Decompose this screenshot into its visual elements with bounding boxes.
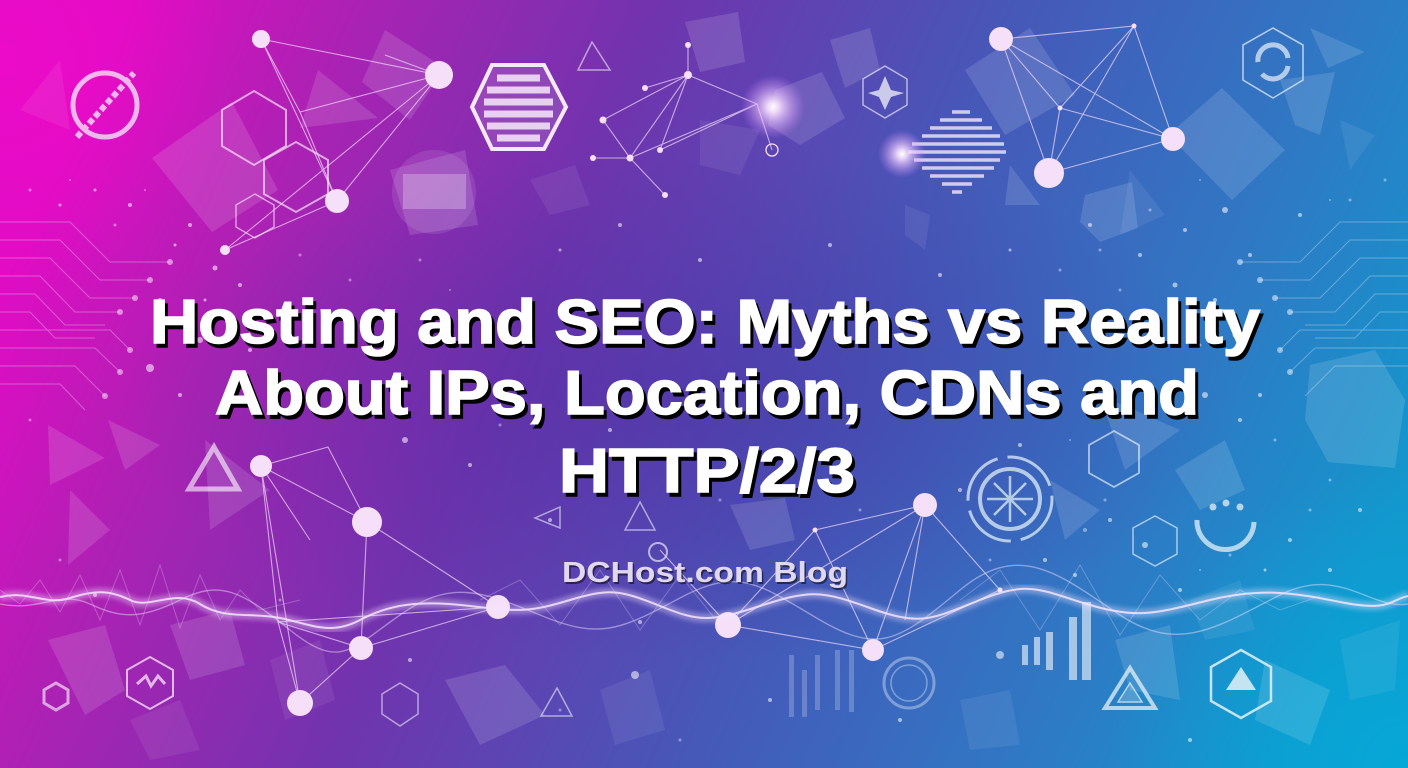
icon: triangle outline (189, 447, 238, 489)
circuit traces left (0, 222, 173, 410)
icon: hexagon outlines right (1089, 431, 1177, 566)
star particles (28, 178, 1386, 742)
title: Hosting and SEO: Myths vs Reality (150, 288, 1261, 357)
icon: small hexagon far left (44, 683, 68, 710)
icon: star hexagon (863, 66, 907, 118)
icon: screen in circle (392, 150, 476, 234)
icon: smile arc (1197, 500, 1254, 550)
title: HTTP/2/3 (562, 441, 858, 510)
icon: nested triangle (1105, 668, 1155, 708)
title: About IPs, Location, CDNs and (218, 363, 1202, 432)
waveform (0, 565, 1408, 652)
network: bottom left (250, 447, 510, 716)
circuit traces right (1237, 222, 1408, 396)
subtitle: blog name: DCHost.com Blog (562, 557, 848, 589)
network: top centre (590, 42, 778, 198)
network: top left (220, 30, 453, 255)
icon: crossed circle (73, 73, 137, 137)
title: About IPs, Location, CDNs and (215, 359, 1199, 428)
icon: target wheel (968, 457, 1052, 541)
glow: bright star beside diamond (878, 130, 926, 178)
title (150, 288, 1264, 510)
title: Hosting and SEO: Myths vs Reality (153, 292, 1264, 361)
icon: small hexagon bottom left (127, 657, 173, 709)
subtitle: blog name: DCHost.com Blog (564, 559, 850, 591)
icon: striped hexagon (472, 65, 566, 149)
glow: bright star centre top (741, 75, 805, 139)
icon: hexagon with triangle (1211, 650, 1271, 718)
icon: refresh hexagon (1243, 28, 1303, 98)
icon: bar chart (1022, 602, 1091, 680)
title: HTTP/2/3 (559, 437, 855, 506)
icon: striped diamond (908, 112, 1006, 192)
network: bottom centre right (649, 493, 1002, 661)
network: top right (989, 24, 1185, 188)
icon: vertical bars (789, 650, 854, 717)
icon: hexagon outlines (222, 91, 328, 238)
icon: small triangles (382, 42, 655, 726)
icon: ring (884, 658, 934, 708)
